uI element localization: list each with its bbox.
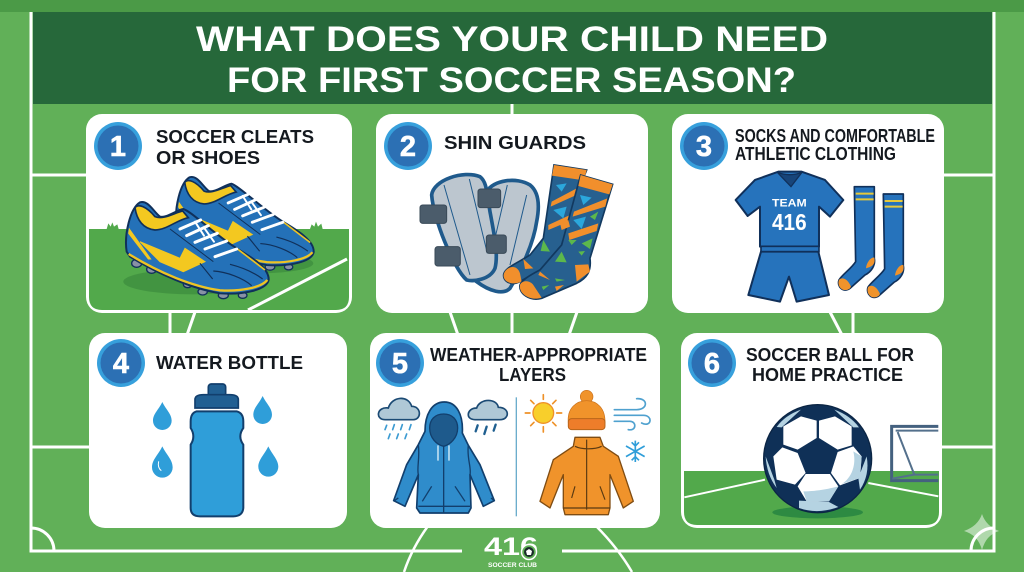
heading 1: OR SHOES: [156, 148, 260, 168]
heading 5: WEATHER-APPROPRIATE: [430, 345, 647, 365]
number badge 3: 3: [696, 131, 712, 163]
title line 2: FOR FIRST SOCCER SEASON?: [227, 60, 796, 100]
heading 4: WATER BOTTLE: [156, 353, 303, 373]
logo: 416 soccer club: [484, 533, 538, 569]
heading 6: [746, 345, 914, 385]
number badge 3: [680, 122, 728, 170]
heading 2: SHIN GUARDS: [444, 133, 586, 153]
number badge 5: [376, 339, 424, 387]
number badge 6: [688, 339, 736, 387]
heading 1: [156, 127, 314, 168]
panel: socks and athletic clothing: [672, 114, 944, 313]
title line 1: WHAT DOES YOUR CHILD NEED: [196, 19, 828, 59]
icon: soccer ball and goal: [684, 405, 938, 518]
heading 3: [735, 126, 935, 164]
heading 1: SOCCER CLEATS: [156, 127, 314, 147]
number badge 4: 4: [113, 348, 129, 380]
panel: water bottle: [89, 333, 347, 528]
panel: weather layers: [370, 333, 660, 528]
icon: logo ball: [522, 544, 536, 560]
panel: soccer ball: [681, 333, 942, 528]
icon: jersey, shorts and socks: 416: [772, 209, 807, 235]
icon: jersey, shorts and socks: TEAM: [772, 198, 807, 210]
number badge 6: 6: [704, 348, 720, 380]
number badge 2: [384, 122, 432, 170]
icon: shin guards and socks: [420, 165, 613, 299]
icon: jersey, shorts and socks: [736, 172, 904, 302]
icon: rain jacket and warm jacket: [378, 390, 650, 516]
number badge 5: 5: [392, 348, 408, 380]
panel: shin guards: [376, 114, 648, 313]
number badge 1: [94, 122, 142, 170]
heading 3: ATHLETIC CLOTHING: [735, 144, 896, 164]
number badge 2: 2: [400, 131, 416, 163]
heading 3: SOCKS AND COMFORTABLE: [735, 126, 935, 146]
number badge 1: 1: [110, 131, 126, 163]
icon: pair of cleats: [107, 177, 323, 299]
heading 5: LAYERS: [499, 365, 566, 385]
panel: soccer cleats: [86, 114, 352, 313]
logo: 416 soccer club: 416: [484, 533, 538, 561]
icon: sparkle watermark: [964, 514, 999, 550]
icon: water bottle and drops: [152, 384, 278, 516]
heading 6: SOCCER BALL FOR: [746, 345, 914, 365]
number badge 4: [97, 339, 145, 387]
title banner: [33, 12, 992, 104]
logo: 416 soccer club: SOCCER CLUB: [488, 562, 537, 569]
heading 6: HOME PRACTICE: [752, 365, 903, 385]
heading 5: [430, 345, 647, 385]
